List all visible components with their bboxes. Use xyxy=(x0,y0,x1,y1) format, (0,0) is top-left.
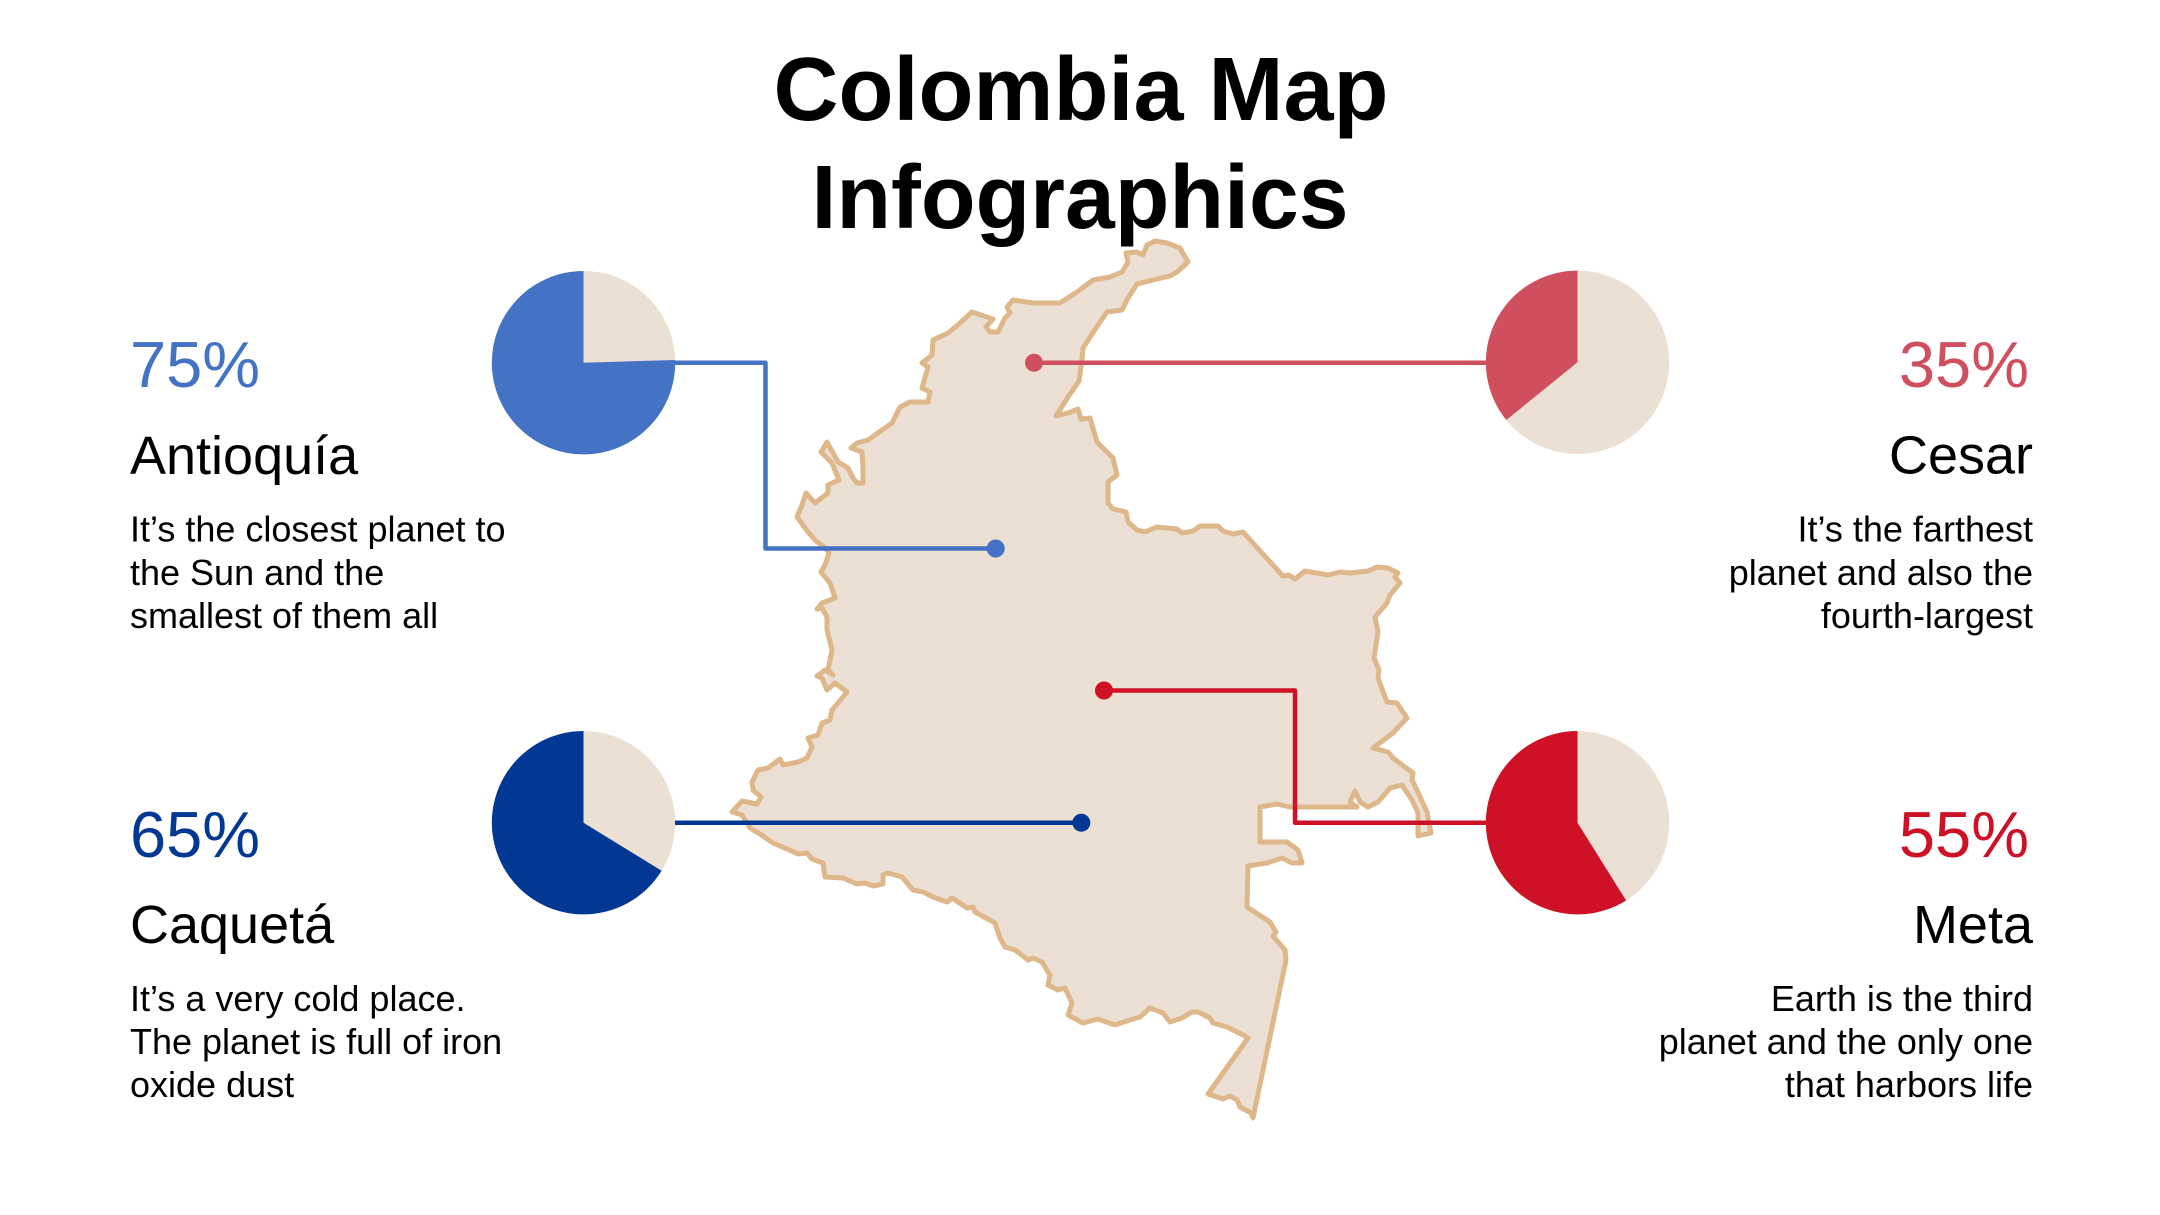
panel: Cesar xyxy=(1025,271,2033,636)
Antioquía name: Antioquía xyxy=(130,426,359,486)
panel: Antioquía xyxy=(130,271,1005,636)
Antioquía description: It’s the closest planet to xyxy=(130,508,506,550)
map of Colombia xyxy=(732,241,1431,1118)
Antioquía description: the Sun and the xyxy=(130,552,384,593)
panel: Meta xyxy=(1095,682,2034,1105)
Meta description: planet and the only one xyxy=(1659,1021,2033,1062)
panel: Caquetá xyxy=(130,731,1090,1105)
Cesar pie chart xyxy=(1486,271,1669,454)
Meta pie chart xyxy=(1486,731,1669,914)
Cesar description: planet and also the xyxy=(1729,552,2033,593)
title: Infographics xyxy=(812,148,1348,248)
Meta percentage: 55% xyxy=(1899,798,2029,871)
Caquetá description: The planet is full of iron xyxy=(130,1021,502,1062)
Meta name: Meta xyxy=(1913,895,2034,955)
Cesar description: fourth-largest xyxy=(1821,595,2033,636)
Antioquía description: smallest of them all xyxy=(130,595,438,636)
Antioquía connector xyxy=(675,363,1005,558)
Cesar connector xyxy=(1025,354,1487,372)
Caquetá pie chart xyxy=(492,731,675,914)
Cesar description: It’s the farthest xyxy=(1798,508,2033,550)
title: Colombia Map xyxy=(773,40,1389,140)
Caquetá connector xyxy=(675,814,1090,832)
Antioquía pie chart xyxy=(492,271,675,454)
title xyxy=(773,40,1389,248)
Meta connector xyxy=(1095,682,1487,823)
Meta description: that harbors life xyxy=(1785,1064,2033,1105)
Caquetá description: It’s a very cold place. xyxy=(130,978,466,1019)
Cesar name: Cesar xyxy=(1889,426,2033,486)
Antioquía percentage: 75% xyxy=(130,328,260,401)
Cesar percentage: 35% xyxy=(1899,328,2029,401)
Meta description: Earth is the third xyxy=(1771,978,2033,1019)
Caquetá name: Caquetá xyxy=(130,895,335,955)
Caquetá percentage: 65% xyxy=(130,798,260,871)
Caquetá description: oxide dust xyxy=(130,1064,294,1105)
